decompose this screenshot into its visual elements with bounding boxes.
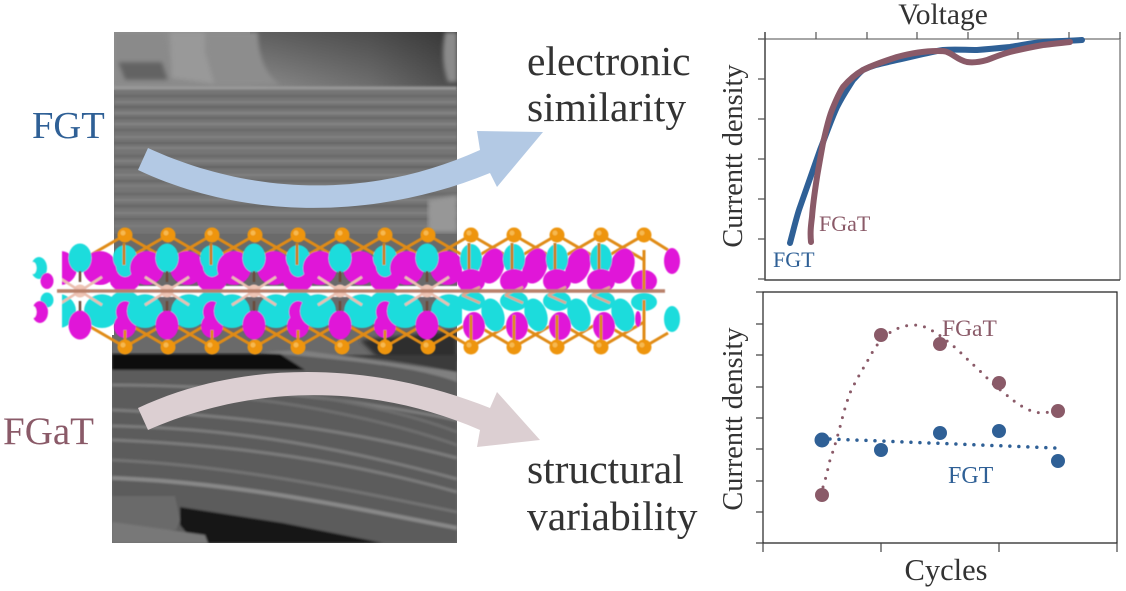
y axis title: Currentt density [718, 327, 749, 511]
axis frame [765, 39, 1120, 280]
label: FGT: FGT [773, 247, 815, 272]
dotted fit: FGT [830, 439, 1056, 448]
x axis title: Cycles [904, 553, 988, 587]
axis frame [763, 292, 1117, 543]
label: FGaT: FGaT [819, 211, 871, 236]
label: FGT: FGT [32, 105, 105, 147]
crystal structure with charge density [30, 228, 680, 354]
left edge lobes [30, 257, 54, 323]
bottom atoms [118, 340, 652, 354]
y axis title: Currentt density [718, 64, 749, 248]
chart: current density vs voltage [718, 0, 1120, 280]
label: FGaT: FGaT [942, 316, 997, 342]
heading: electronic similarity: electronic [527, 38, 691, 84]
data points: FGaT [815, 328, 1065, 502]
top atoms [118, 228, 652, 242]
label: FGT: FGT [948, 463, 994, 489]
label: FGaT: FGaT [3, 410, 94, 453]
isosurface lobes [40, 243, 657, 347]
data points: FGT [814, 424, 1065, 468]
microscope image of layered crystal [112, 32, 457, 543]
arrow: FGT to electronic similarity [138, 131, 543, 208]
central metal rod [57, 289, 665, 293]
heading: electronic similarity: similarity [527, 84, 686, 130]
right edge lobes [664, 248, 680, 332]
curve: FGT [790, 40, 1082, 243]
curve: FGaT [811, 42, 1070, 242]
white gap around metal layer [90, 286, 460, 297]
dotted fit: FGaT [823, 325, 1050, 487]
chart: current density vs cycles [718, 292, 1117, 587]
zigzag bonds [82, 235, 668, 347]
arrow: FGaT to structural variability [138, 372, 540, 447]
heading: structural variability: structural [527, 446, 684, 492]
heading: structural variability: variability [527, 493, 698, 539]
